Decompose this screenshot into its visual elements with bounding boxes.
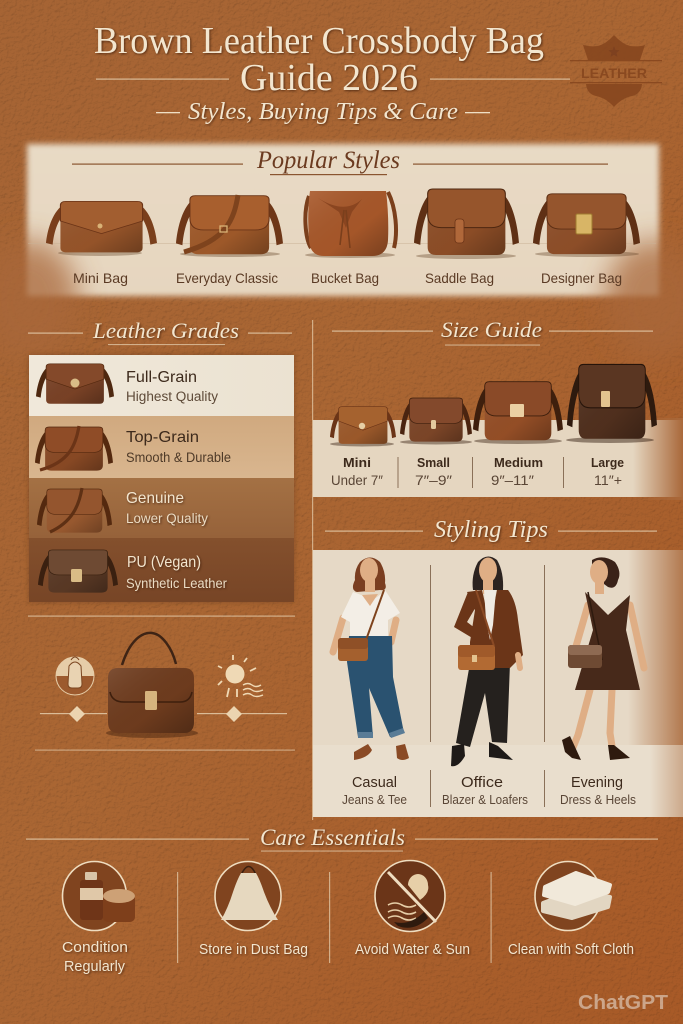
text: evening (560, 774, 636, 807)
icon: leather stamp (570, 35, 662, 107)
size labels: 9″–11″ (491, 472, 534, 488)
grade row: top-grain: Smooth & Durable (126, 450, 231, 465)
panel: styling tips (313, 517, 683, 817)
size labels: Large (591, 455, 624, 470)
icon: hanger tag (56, 657, 94, 695)
heading: styling tips: Styling Tips (434, 517, 548, 543)
bag: everyday classic: Everyday Classic (176, 270, 278, 286)
panel: leather grades (28, 318, 294, 602)
text: casual (342, 774, 407, 807)
panel: bag feature illustration (28, 616, 295, 751)
icon: bag with handle (106, 633, 198, 738)
size labels: Small (417, 455, 450, 470)
grade row: top-grain: Top-Grain (126, 429, 199, 446)
heading: leather grades: Leather Grades (92, 318, 239, 343)
grade row: full-grain: Highest Quality (126, 389, 218, 404)
grade row: pu vegan: Synthetic Leather (126, 576, 227, 591)
text: store in dust bag: Store in Dust Bag (199, 942, 308, 958)
panel: size guide (313, 317, 683, 500)
bag: mini bag (46, 201, 157, 286)
bag: saddle bag (414, 189, 519, 286)
icon: leather stamp: LEATHER (581, 65, 647, 81)
heading: popular styles: Popular Styles (256, 147, 400, 174)
icon: dust bag (215, 862, 281, 930)
grade row: pu vegan (29, 538, 294, 602)
figure: casual outfit (333, 558, 409, 760)
bag: small size (400, 398, 472, 444)
text: office (442, 774, 528, 807)
heading: size guide: Size Guide (441, 317, 542, 342)
grade row: genuine (29, 478, 294, 538)
size labels: 11″+ (594, 472, 622, 488)
icon: diamond right (226, 706, 242, 722)
title: Brown Leather Crossbody Bag (94, 20, 544, 62)
section divider (312, 320, 313, 820)
text: evening: Evening (571, 774, 623, 791)
bag: designer bag: Designer Bag (541, 270, 622, 286)
icon: avoid water and sun (375, 860, 445, 932)
text: avoid water and sun: Avoid Water & Sun (355, 942, 470, 958)
size labels: 7″–9″ (415, 472, 452, 488)
text: office: Blazer & Loafers (442, 792, 528, 807)
bag: bucket bag: Bucket Bag (311, 270, 379, 286)
size labels: Medium (494, 455, 543, 470)
grade row: full-grain: Full-Grain (126, 369, 197, 386)
text: office: Office (461, 774, 503, 791)
figure: evening outfit (562, 557, 644, 760)
bag: mini bag: Mini Bag (73, 270, 128, 286)
panel: popular styles (0, 144, 683, 360)
title (94, 20, 570, 99)
grade row: genuine: Lower Quality (126, 511, 208, 526)
grade row: full-grain (29, 355, 294, 416)
text: evening: Dress & Heels (560, 792, 636, 807)
figure: office outfit (451, 556, 523, 766)
icon: conditioner bottles (62, 862, 135, 930)
size labels: Under 7″ (331, 472, 383, 488)
icon: soft cloth (535, 862, 610, 930)
grade row: pu vegan: PU (Vegan) (127, 554, 201, 571)
size labels: Mini (343, 455, 371, 470)
care dividers (177, 872, 492, 963)
size labels (331, 455, 624, 488)
subtitle: Styles, Buying Tips & Care (188, 99, 458, 125)
bag: designer bag (533, 194, 640, 286)
bag: saddle bag: Saddle Bag (425, 270, 494, 286)
watermark: ChatGPT (578, 992, 668, 1014)
panel: care essentials (26, 825, 658, 975)
text: condition regularly: Regularly (64, 959, 126, 975)
size panel background (313, 418, 683, 500)
grade table background (29, 355, 294, 602)
title: Guide 2026 (240, 57, 418, 99)
bag: mini size (330, 407, 396, 446)
bag: medium size (473, 382, 563, 444)
text: condition regularly: Condition (62, 940, 128, 956)
grade row: top-grain (29, 416, 294, 478)
bag: bucket bag (305, 191, 396, 286)
text: casual: Casual (352, 774, 397, 791)
icon: sun and water (218, 655, 263, 697)
text: condition regularly (62, 940, 128, 975)
icon: decorative diamond left (69, 706, 85, 722)
bag: large size (566, 364, 657, 443)
text: clean with soft cloth: Clean with Soft Cloth (508, 942, 634, 958)
text: casual: Jeans & Tee (342, 792, 407, 807)
grade row: genuine: Genuine (126, 490, 184, 507)
bag: everyday classic (176, 195, 283, 286)
panel background (0, 144, 683, 360)
heading: care essentials: Care Essentials (260, 825, 405, 850)
styling panel background (313, 550, 683, 817)
